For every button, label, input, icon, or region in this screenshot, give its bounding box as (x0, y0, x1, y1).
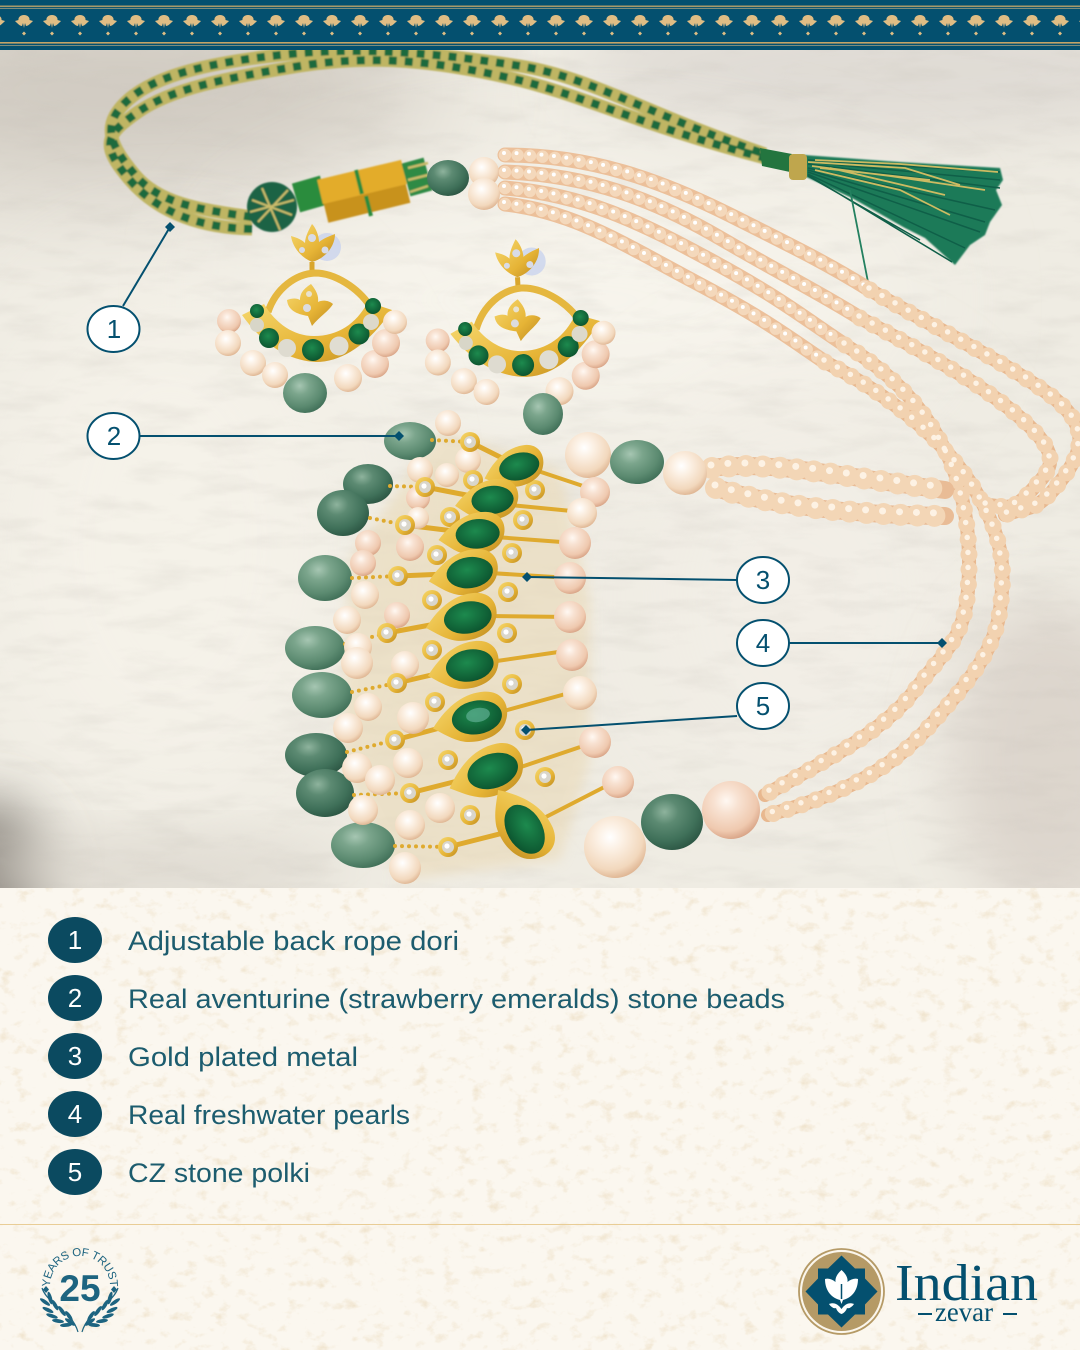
legend item 2 (48, 975, 785, 1021)
badge: 25 years of trust (40, 1248, 120, 1332)
left earring (215, 224, 407, 413)
back rope dori (110, 51, 765, 232)
photo: pearl and emerald necklace set on white fur (0, 50, 1080, 888)
page background: paper panel (0, 888, 1080, 1350)
logo wordmark: Indian (895, 1255, 1038, 1312)
pendant shadow and gold mass (340, 430, 590, 880)
callout 4: freshwater pearls: 4 (756, 628, 770, 658)
badge: 25 years of trust: 25 (59, 1268, 101, 1309)
right earring (419, 234, 619, 435)
pearl strands (504, 153, 1079, 815)
legend item 5: 5 (68, 1157, 82, 1187)
callout 1: rope dori: 1 (107, 314, 121, 344)
callout 2: aventurine beads: 2 (107, 421, 121, 451)
legend item 2: 2 (68, 983, 82, 1013)
legend item 3 (48, 1033, 358, 1079)
legend item 4: Real freshwater pearls (128, 1100, 410, 1130)
logo emblem (799, 1249, 884, 1334)
CZ stone polki settings (377, 432, 555, 857)
fur background (0, 50, 1080, 888)
pendant (285, 410, 634, 884)
callout 1: rope dori (88, 222, 175, 352)
callout 5: CZ stone polki (521, 683, 789, 735)
dori knot (247, 182, 297, 232)
legend item 5 (48, 1149, 310, 1195)
legend item 1: Adjustable back rope dori (128, 926, 459, 956)
clasp green bead and pearls (427, 157, 500, 210)
emerald settings (421, 441, 563, 870)
callout 3: gold plated metal: 3 (756, 565, 770, 595)
badge: 25 years of trust: YEARS OF TRUST (42, 1248, 118, 1286)
callout 5: CZ stone polki: 5 (756, 691, 770, 721)
gold stems (345, 440, 618, 847)
legend item 5: CZ stone polki (128, 1158, 310, 1188)
callout 2: aventurine beads (88, 413, 404, 459)
callout 3: gold plated metal (522, 557, 789, 603)
legend item 3: 3 (68, 1041, 82, 1071)
legend item 3: Gold plated metal (128, 1042, 358, 1072)
aventurine drop beads (285, 422, 436, 868)
legend item 2: Real aventurine (strawberry emeralds) stone beads (128, 984, 785, 1014)
logo: Indian Zevar (799, 1249, 1038, 1334)
header band with gold motif border (0, 0, 1080, 50)
tassel (760, 148, 1003, 282)
legend item 4: 4 (68, 1099, 82, 1129)
legend item 1: 1 (68, 925, 82, 955)
choker side beads (565, 432, 760, 878)
logo wordmark: zevar (935, 1297, 993, 1327)
legend list (48, 917, 785, 1195)
stem-end pearls (554, 477, 634, 798)
legend item 1 (48, 917, 459, 963)
legend item 4 (48, 1091, 410, 1137)
callout 4: freshwater pearls (737, 620, 947, 666)
small freshwater pearls (333, 410, 481, 884)
gold thread barrels (296, 163, 428, 216)
